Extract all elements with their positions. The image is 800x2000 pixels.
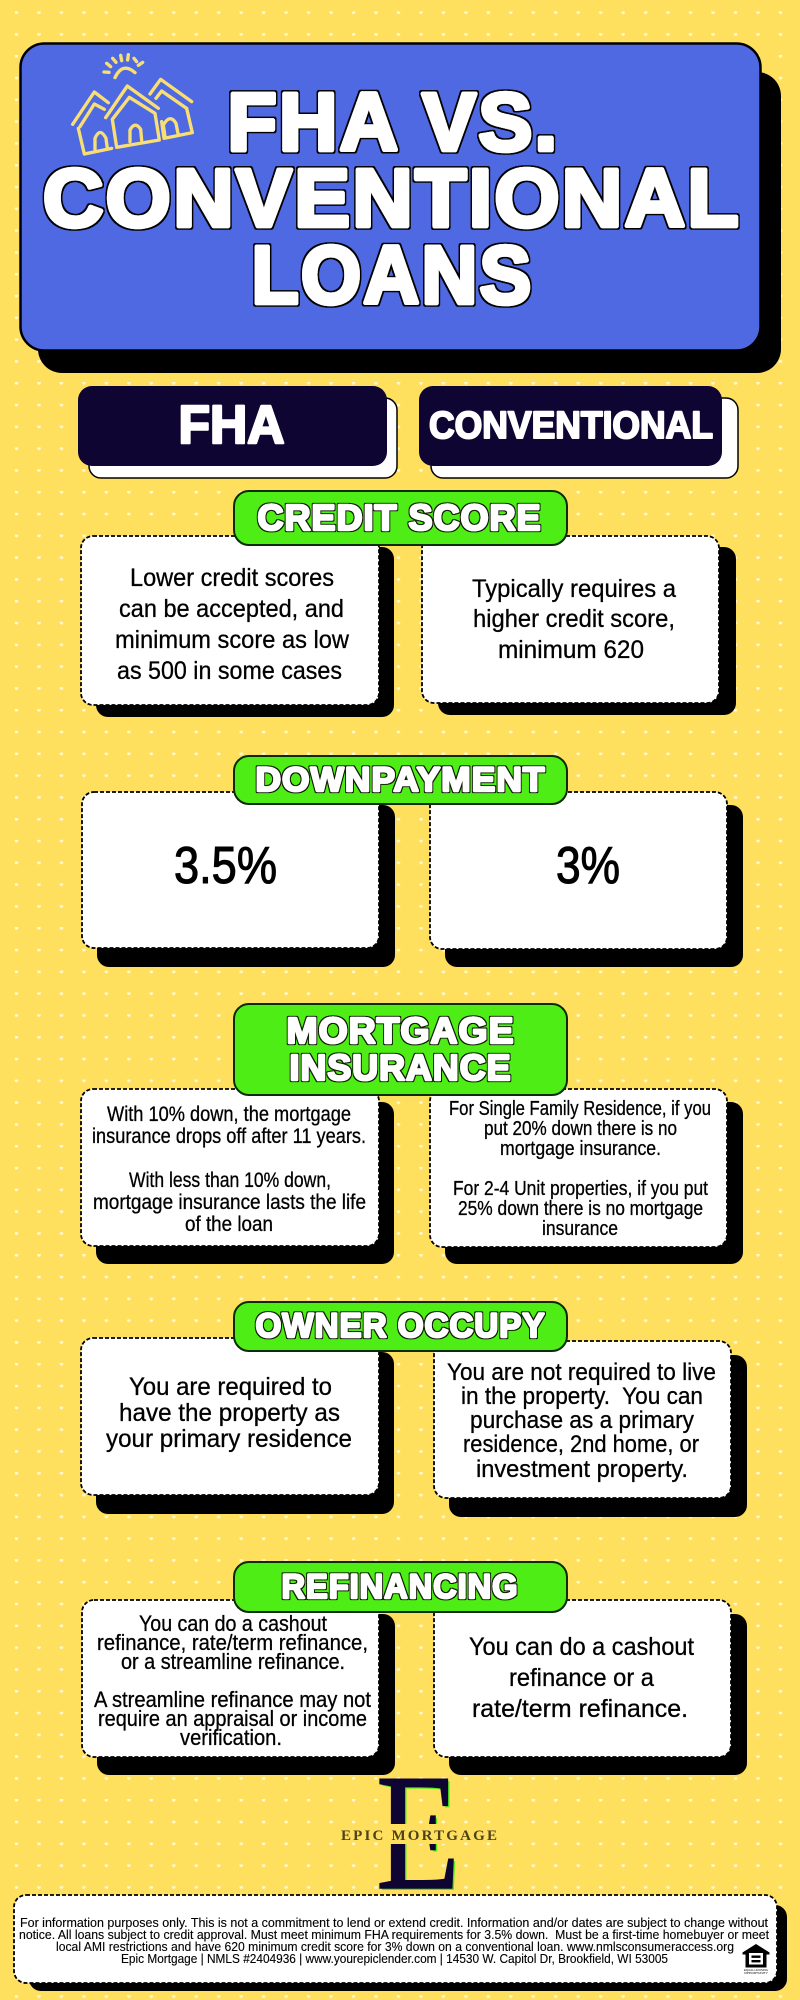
heading: credit score: CREDIT SCORE bbox=[258, 497, 542, 538]
FHA mortgage insurance card: With 10% down, the mortgage bbox=[107, 1103, 351, 1126]
FHA refinancing card: refinance, rate/term refinance, bbox=[97, 1630, 368, 1655]
Conventional owner occupy card: in the property. You can bbox=[461, 1383, 703, 1410]
FHA refinancing card: You can do a cashout bbox=[139, 1611, 327, 1636]
column header: Conventional: CONVENTIONAL bbox=[429, 405, 713, 447]
title bbox=[43, 77, 741, 321]
icon: equal housing opportunity: EQUAL HOUSING bbox=[744, 1968, 768, 1972]
heading: owner occupy bbox=[234, 1302, 567, 1351]
FHA refinancing card bbox=[82, 1600, 395, 1775]
FHA downpayment card bbox=[82, 792, 395, 967]
Conventional mortgage insurance card: 25% down there is no mortgage bbox=[458, 1198, 703, 1220]
Conventional mortgage insurance card: For Single Family Residence, if you bbox=[449, 1098, 711, 1120]
disclaimer text: Epic Mortgage | NMLS #2404936 | www.yourepiclender.com | 14530 W. Capitol Dr, Brookfield, WI 53005 bbox=[121, 1952, 668, 1966]
panel: downpayment bbox=[82, 756, 743, 967]
heading: mortgage insurance bbox=[234, 1004, 567, 1095]
title: FHA VS. bbox=[228, 77, 560, 168]
logo: Epic Mortgage: E bbox=[378, 1742, 462, 1926]
FHA owner occupy card: your primary residence bbox=[106, 1425, 352, 1453]
disclaimer text: notice. All loans subject to credit approval. Must meet minimum FHA requirements for 3.5% down. Must be a first-time homebuyer or meet bbox=[19, 1928, 770, 1942]
Conventional refinancing card: rate/term refinance. bbox=[472, 1695, 688, 1723]
FHA credit score card: can be accepted, and bbox=[119, 595, 344, 623]
icon: equal housing opportunity: OPPORTUNITY bbox=[744, 1971, 768, 1975]
panel: credit score bbox=[81, 491, 736, 717]
heading: mortgage insurance: INSURANCE bbox=[290, 1047, 512, 1088]
Conventional mortgage insurance card: insurance bbox=[542, 1218, 618, 1240]
Conventional downpayment card bbox=[430, 792, 743, 967]
heading: owner occupy: OWNER OCCUPY bbox=[256, 1307, 546, 1345]
panel: title banner bbox=[20, 44, 781, 373]
heading: mortgage insurance: MORTGAGE bbox=[286, 1010, 514, 1051]
Conventional refinancing card: refinance or a bbox=[509, 1664, 654, 1692]
disclaimer text bbox=[19, 1916, 770, 1966]
icon: equal housing opportunity bbox=[742, 1944, 770, 1975]
FHA refinancing card: or a streamline refinance. bbox=[121, 1649, 345, 1674]
heading: credit score bbox=[234, 491, 567, 545]
FHA owner occupy card: have the property as bbox=[119, 1399, 340, 1427]
FHA refinancing card: require an appraisal or income bbox=[98, 1706, 367, 1731]
Conventional owner occupy card: purchase as a primary bbox=[470, 1407, 694, 1434]
panel: disclaimer bbox=[14, 1895, 787, 1991]
panel: owner occupy bbox=[81, 1302, 747, 1517]
FHA mortgage insurance card: With less than 10% down, bbox=[129, 1169, 331, 1192]
Conventional owner occupy card: investment property. bbox=[476, 1456, 688, 1483]
Conventional credit score card: minimum 620 bbox=[498, 636, 644, 664]
FHA owner occupy card bbox=[81, 1338, 394, 1514]
Conventional mortgage insurance card: put 20% down there is no bbox=[484, 1118, 677, 1140]
FHA credit score card: minimum score as low bbox=[115, 626, 350, 654]
FHA mortgage insurance card: of the loan bbox=[185, 1213, 273, 1236]
Conventional credit score card: Typically requires a bbox=[472, 575, 676, 603]
heading: refinancing: REFINANCING bbox=[282, 1568, 518, 1606]
heading: downpayment: DOWNPAYMENT bbox=[256, 761, 546, 799]
Conventional refinancing card: You can do a cashout bbox=[469, 1633, 694, 1661]
title: CONVENTIONAL bbox=[43, 153, 741, 244]
Conventional owner occupy card: residence, 2nd home, or bbox=[463, 1431, 699, 1458]
FHA credit score card bbox=[81, 536, 394, 717]
column header: Conventional bbox=[419, 386, 738, 478]
disclaimer text: local AMI restrictions and have 620 minimum credit score for 3% down on a conventional loan. www.nmlsconsumeraccess.org bbox=[56, 1940, 734, 1954]
column header: FHA bbox=[78, 386, 397, 478]
column header: FHA: FHA bbox=[178, 395, 284, 455]
FHA refinancing card: A streamline refinance may not bbox=[94, 1687, 371, 1712]
Conventional credit score card bbox=[422, 536, 736, 715]
logo: Epic Mortgage: EPIC MORTGAGE bbox=[341, 1828, 497, 1844]
panel: refinancing bbox=[82, 1562, 747, 1775]
Conventional credit score card: higher credit score, bbox=[473, 605, 675, 633]
FHA refinancing card: verification. bbox=[180, 1725, 282, 1750]
FHA mortgage insurance card bbox=[81, 1089, 394, 1264]
Conventional owner occupy card: You are not required to live bbox=[447, 1359, 716, 1386]
Conventional downpayment card: 3% bbox=[556, 837, 620, 895]
FHA credit score card: as 500 in some cases bbox=[117, 657, 342, 685]
heading: downpayment bbox=[234, 756, 567, 804]
icon: houses with sun bbox=[73, 55, 192, 154]
title: LOANS bbox=[252, 230, 534, 321]
FHA mortgage insurance card: mortgage insurance lasts the life bbox=[93, 1191, 366, 1214]
FHA downpayment card: 3.5% bbox=[174, 837, 277, 895]
Conventional refinancing card bbox=[434, 1600, 747, 1775]
Conventional mortgage insurance card bbox=[430, 1089, 743, 1264]
FHA credit score card: Lower credit scores bbox=[130, 564, 334, 592]
Conventional mortgage insurance card: For 2-4 Unit properties, if you put bbox=[453, 1178, 708, 1200]
heading: refinancing bbox=[234, 1562, 567, 1612]
logo: Epic Mortgage: E bbox=[376, 1740, 460, 1924]
FHA mortgage insurance card: insurance drops off after 11 years. bbox=[92, 1125, 366, 1148]
panel: mortgage insurance bbox=[81, 1004, 743, 1264]
FHA owner occupy card: You are required to bbox=[129, 1373, 332, 1401]
disclaimer text: For information purposes only. This is not a commitment to lend or extend credit. Information and/or dates are subject to change without bbox=[20, 1916, 769, 1930]
Conventional mortgage insurance card: mortgage insurance. bbox=[500, 1138, 661, 1160]
Conventional owner occupy card bbox=[434, 1341, 747, 1517]
logo: Epic Mortgage bbox=[341, 1740, 497, 1926]
